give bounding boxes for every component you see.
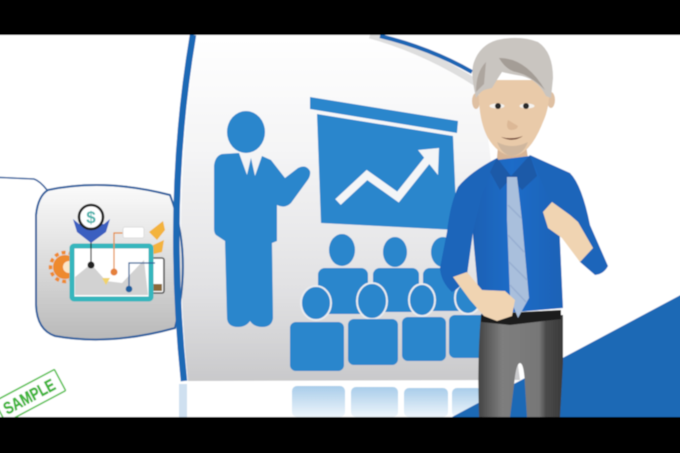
audience floor reflection (292, 386, 482, 417)
floor reflection of edge (179, 384, 187, 417)
ears (472, 93, 480, 109)
face (479, 80, 549, 156)
black top letterbox bar (0, 0, 680, 35)
icon: projection screen with rising arrow (310, 97, 458, 230)
left sleeve (440, 158, 497, 292)
black bottom letterbox bar (0, 417, 680, 453)
upper arc (380, 36, 472, 72)
trousers (478, 315, 563, 417)
tie (507, 177, 529, 318)
icon: audience (290, 234, 489, 371)
beard shadow (497, 142, 528, 156)
panel: presentation backdrop (179, 35, 520, 417)
left forearm and fist (453, 272, 515, 321)
belt (481, 310, 561, 325)
chart markers (90, 228, 92, 265)
hair (472, 38, 553, 98)
icon: gear (50, 252, 80, 282)
note bubble (123, 227, 144, 238)
character: presenter man (440, 38, 608, 417)
icon: dollar pin: $ (86, 208, 96, 227)
stamp: SAMPLE: SAMPLE (0, 375, 59, 418)
rising arrow (338, 153, 433, 202)
right sleeve (530, 155, 608, 275)
nose (507, 120, 518, 130)
eyes (490, 103, 534, 109)
mouth (501, 136, 523, 140)
icon: monitor frame (72, 228, 155, 299)
panel: small infographic box (36, 185, 183, 340)
neck (496, 145, 530, 182)
panel top shading band (370, 35, 478, 84)
blue panel edge curve (176, 35, 193, 381)
shirt torso (470, 156, 563, 315)
icon: mobile phone (148, 258, 164, 293)
right forearm and hand (543, 202, 593, 262)
connector line (0, 177, 47, 190)
icon: presenter silhouette (214, 111, 310, 327)
icon: dollar pin (73, 205, 110, 243)
blue diagonal corner (452, 290, 680, 417)
icon: orange leaves (149, 221, 165, 254)
collar (490, 155, 537, 190)
